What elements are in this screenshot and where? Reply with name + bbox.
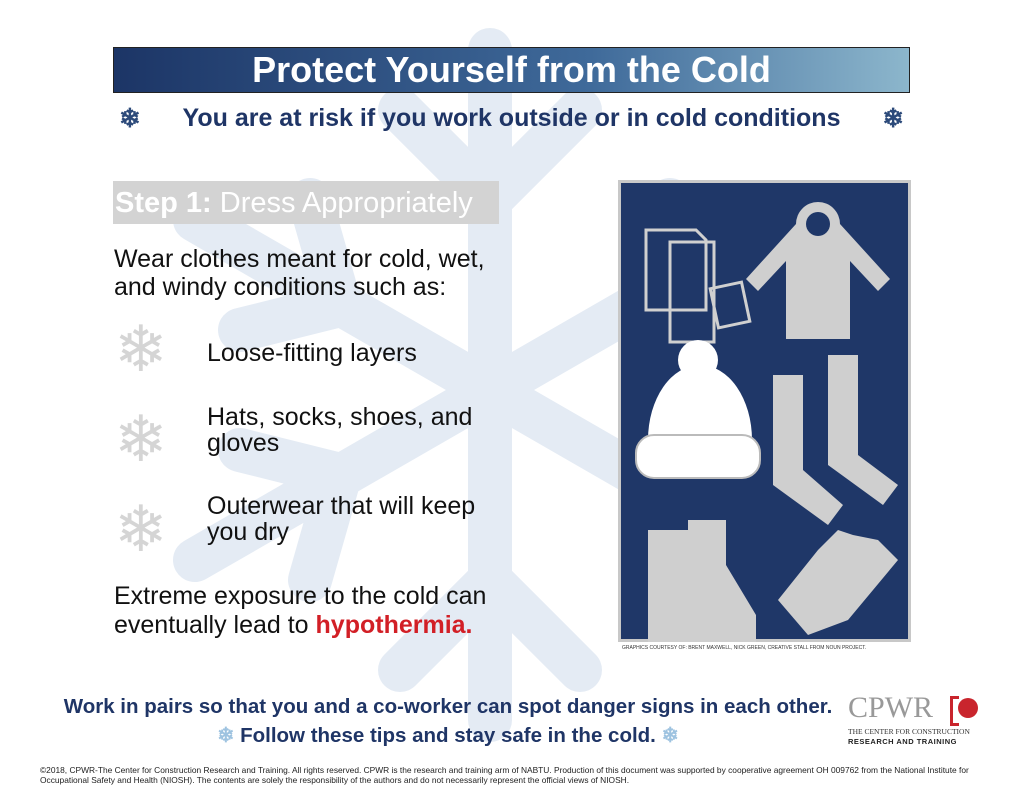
- bottom message: [64, 695, 832, 747]
- list: Outerwear that will keep: [207, 492, 475, 520]
- credits: GRAPHICS COURTESY OF: BRENT MAXWELL, NICK GREEN, CREATIVE STALL FROM NOUN PROJECT.: [622, 645, 866, 651]
- subtitle: You are at risk if you work outside or in cold conditions: [183, 104, 840, 132]
- title bar: Protect Yourself from the Cold: [252, 49, 771, 90]
- list: Hats, socks, shoes, and: [207, 403, 472, 431]
- logo: CPWR: [848, 691, 933, 724]
- bottom message: ❄ Follow these tips and stay safe in the cold. ❄: [217, 724, 679, 747]
- clothing panel: [618, 180, 911, 642]
- hypothermia text: eventually lead to hypothermia.: [114, 611, 473, 639]
- bottom message: Work in pairs so that you and a co-worker can spot danger signs in each other.: [64, 695, 832, 718]
- intro text: [114, 245, 485, 301]
- subtitle: ❄: [119, 103, 141, 133]
- hypothermia text: Extreme exposure to the cold can: [114, 582, 486, 610]
- list: gloves: [207, 429, 279, 457]
- list: Loose-fitting layers: [207, 339, 417, 367]
- subtitle: ❄: [882, 103, 904, 133]
- logo: RESEARCH AND TRAINING: [848, 737, 957, 746]
- title bar: [113, 47, 910, 93]
- logo: [848, 691, 978, 746]
- list: ❄: [114, 493, 168, 565]
- logo: THE CENTER FOR CONSTRUCTION: [848, 727, 970, 736]
- step heading: [113, 181, 499, 224]
- list: [114, 313, 475, 565]
- hypothermia text: [114, 582, 486, 639]
- footer: ©2018, CPWR-The Center for Construction Research and Training. All rights reserved. CPWR is the research and training arm of NABTU. Production of this document was supported by cooperative agreement OH 009762 from the National Institute for Occupational Safety and Health (NIOSH). The contents are solely the responsibility of the authors and do not necessarily represent the official views of NIOSH.: [40, 765, 969, 785]
- step heading: Step 1: Dress Appropriately: [115, 187, 473, 219]
- intro text: and windy conditions such as:: [114, 273, 446, 301]
- list: ❄: [114, 403, 168, 475]
- intro text: Wear clothes meant for cold, wet,: [114, 245, 485, 273]
- list: ❄: [114, 313, 168, 385]
- list: you dry: [207, 518, 289, 546]
